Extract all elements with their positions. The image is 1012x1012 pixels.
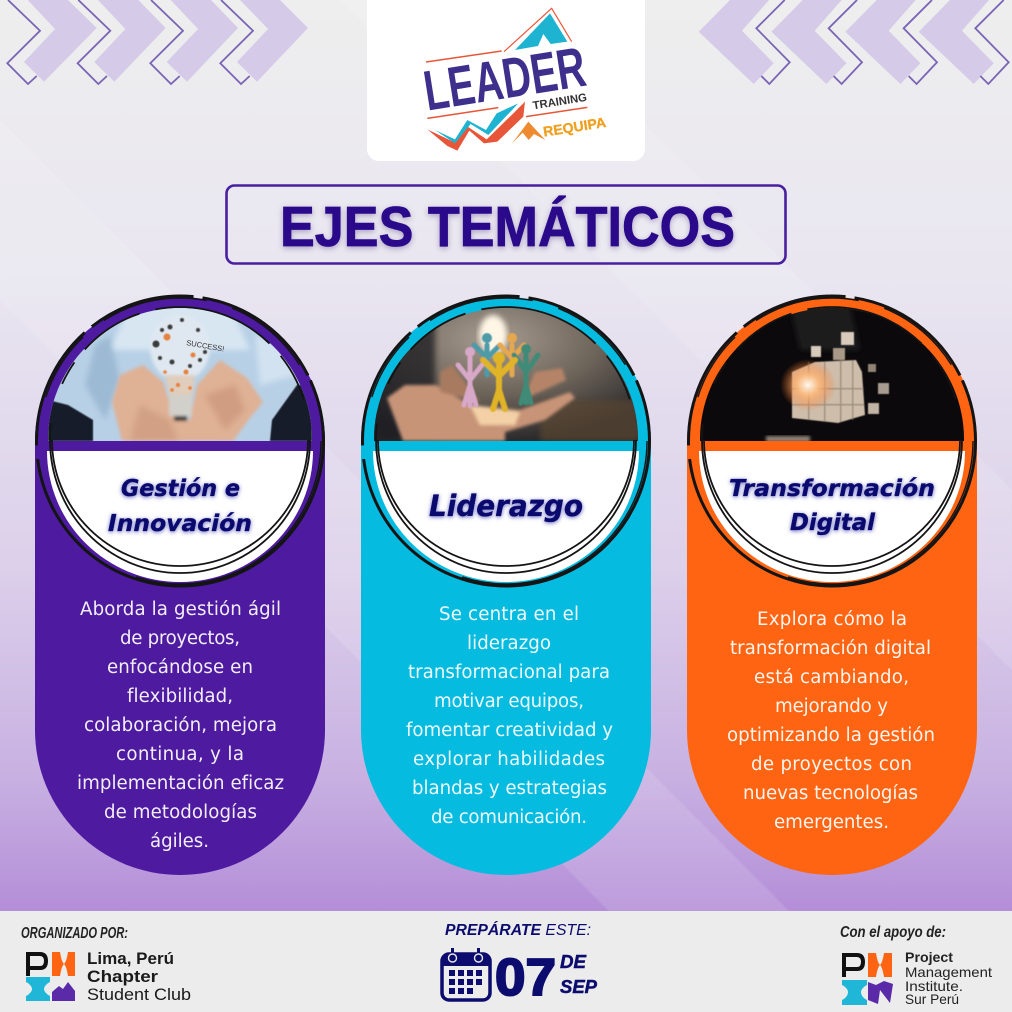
description: flexibilidad,: [127, 686, 233, 707]
description: blandas y estrategias: [412, 778, 607, 799]
description: optimizando la gestión: [727, 725, 935, 746]
panel: Gestión e Innovación: [35, 296, 325, 875]
description: nuevas tecnologías: [743, 783, 918, 804]
logo card: TRAINING: [532, 92, 588, 112]
icon: PMI logo support: [842, 953, 893, 1005]
organizer name: [87, 949, 191, 1004]
description: motivar equipos,: [434, 691, 584, 712]
description: continua, y la: [116, 744, 244, 765]
heading: Gestión e: [121, 474, 240, 502]
description: Aborda la gestión ágil: [80, 599, 281, 620]
organizer name: Lima, Perú: [87, 949, 174, 968]
date number: 07: [495, 949, 556, 1007]
icon: PMI logo organizer: [26, 952, 75, 1001]
heading: Liderazgo: [429, 489, 583, 523]
description: transformación digital: [730, 638, 931, 659]
date month: [560, 952, 598, 997]
organizer name: Chapter: [87, 967, 158, 986]
footer: organizer: [21, 925, 191, 1004]
organizer name: Student Club: [87, 985, 191, 1004]
footer: organizer: ORGANIZADO POR:: [21, 925, 128, 942]
description: está cambiando,: [754, 667, 909, 688]
photo: lightbulb in hands: [48, 305, 312, 441]
heading: Digital: [790, 508, 876, 536]
description: Explora cómo la: [757, 609, 907, 630]
date month: SEP: [560, 977, 598, 997]
description: enfocándose en: [107, 657, 253, 678]
decorative chevrons right: [699, 0, 1009, 84]
supporter name: Project: [905, 949, 953, 965]
heading: Innovación: [108, 509, 252, 537]
description: de proyectos con: [751, 754, 912, 775]
supporter name: Institute.: [905, 978, 963, 994]
description: emergentes.: [774, 812, 889, 833]
logo card: REQUIPA: [542, 114, 607, 140]
photo: hand with paper people: [360, 305, 640, 441]
logo card: [367, 0, 645, 161]
footer: support: [840, 924, 992, 1007]
description: de comunicación.: [431, 807, 587, 828]
panel: Liderazgo: [360, 296, 651, 875]
description: implementación eficaz: [77, 773, 284, 794]
footer: date: [442, 922, 598, 1007]
supporter name: [905, 949, 992, 1007]
heading: [108, 474, 252, 537]
description: de proyectos,: [120, 628, 240, 649]
date month: DE: [560, 952, 587, 972]
description: [727, 609, 935, 833]
description: [77, 599, 284, 852]
footer bar: [0, 911, 1012, 1012]
supporter name: Management: [905, 964, 992, 980]
logo card: LEADER: [420, 36, 590, 124]
decorative chevrons left: [7, 0, 308, 84]
footer: support: Con el apoyo de:: [840, 924, 946, 941]
description: mejorando y: [775, 696, 888, 717]
photo: digital cubes: [700, 305, 964, 442]
footer: date: PREPÁRATE ESTE:: [445, 922, 591, 939]
description: [406, 604, 613, 828]
description: transformacional para: [408, 662, 610, 683]
panel: Transformación Digital: [687, 296, 977, 875]
description: Se centra en el: [439, 604, 579, 625]
description: colaboración, mejora: [84, 715, 277, 736]
description: fomentar creatividad y: [406, 720, 613, 741]
icon: calendar: [442, 948, 490, 1000]
description: ágiles.: [150, 831, 209, 852]
photo: lightbulb in hands: SUCCESS!: [186, 338, 225, 354]
heading: Transformación: [729, 474, 935, 502]
description: de metodologías: [104, 802, 257, 823]
title box: EJES TEMÁTICOS: [280, 195, 735, 259]
supporter name: Sur Perú: [905, 991, 959, 1007]
description: liderazgo: [467, 633, 551, 654]
description: explorar habilidades: [413, 749, 605, 770]
heading: [729, 474, 935, 536]
